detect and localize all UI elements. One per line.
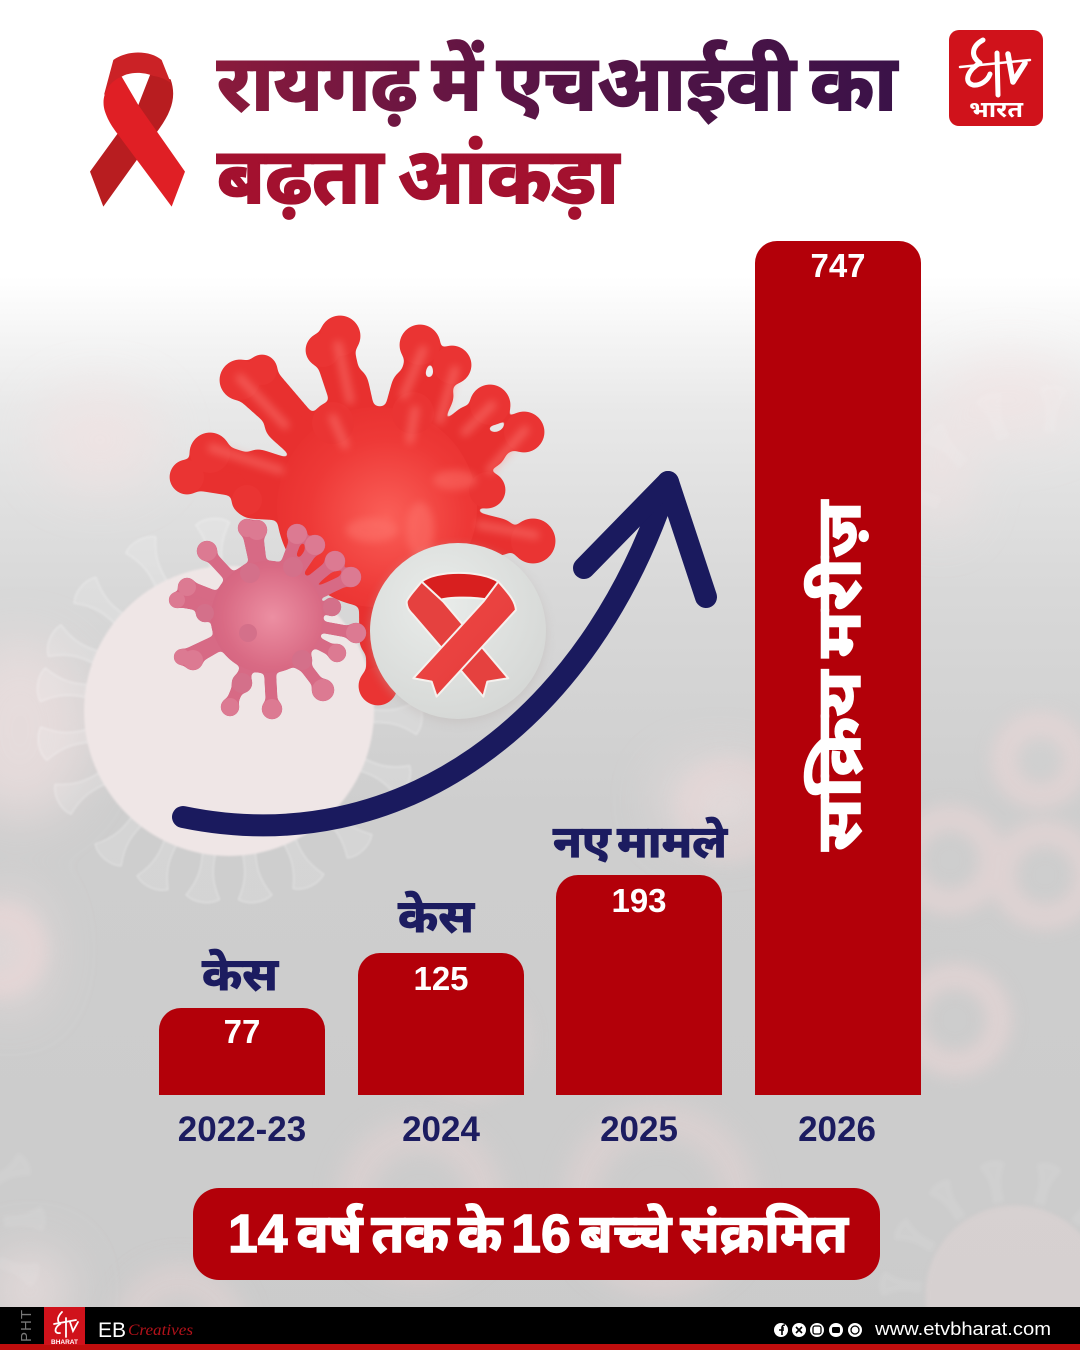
bar chart [159, 241, 921, 1149]
bar 2025: 193 [611, 882, 667, 919]
website url: www.etvbharat.com [874, 1319, 1051, 1339]
illustration: small pink virus [169, 519, 366, 719]
highlights on big virus [212, 345, 535, 558]
bar 2025: नए मामले [553, 816, 729, 867]
ribbon badge [370, 543, 546, 722]
faint background virus [35, 517, 423, 905]
growth arrow [183, 482, 706, 825]
title line 1: रायगढ़ में एचआईवी का [217, 39, 899, 127]
bar 2022-23 [159, 947, 325, 1149]
bar 2022-23: केस [202, 947, 279, 1000]
faint corner viruses [0, 385, 1080, 1350]
bar 2022-23: 77 [224, 1013, 260, 1050]
bar 2025: 2025 [600, 1110, 678, 1149]
bar 2024: केस [398, 889, 475, 942]
title [217, 39, 899, 220]
callout pill [193, 1188, 880, 1280]
footer credit EB Creatives [98, 1319, 193, 1342]
bar 2026: 747 [810, 247, 866, 284]
footer logo: BHARAT [51, 1339, 78, 1346]
logo wordmark: भारत [969, 97, 1023, 122]
footer credit PHT: PHT [18, 1309, 35, 1342]
bar 2024 [358, 889, 524, 1149]
bar 2026: 2026 [798, 1110, 876, 1149]
illustration: big red virus [170, 316, 555, 705]
bar 2026 [755, 241, 921, 1149]
bar 2026: सक्रिय मरीज़ [804, 500, 874, 851]
bar 2025 [553, 816, 729, 1149]
footer logo [44, 1307, 85, 1346]
front knobs [196, 557, 341, 693]
ETV Bharat logo [949, 30, 1043, 126]
footer credit EB Creatives: Creatives [128, 1322, 193, 1339]
footer credit EB Creatives: EB [98, 1319, 126, 1342]
social icons [774, 1323, 862, 1337]
footer bar [0, 1307, 1080, 1350]
red ribbon icon [90, 52, 185, 207]
title line 2: बढ़ता आंकड़ा [217, 132, 621, 220]
bar 2024: 125 [413, 960, 469, 997]
bar 2022-23: 2022-23 [178, 1110, 306, 1149]
badge ribbon [407, 573, 516, 697]
bar 2024: 2024 [402, 1110, 480, 1149]
callout pill: 14 वर्ष तक के 16 बच्चे संक्रमित [228, 1203, 850, 1264]
